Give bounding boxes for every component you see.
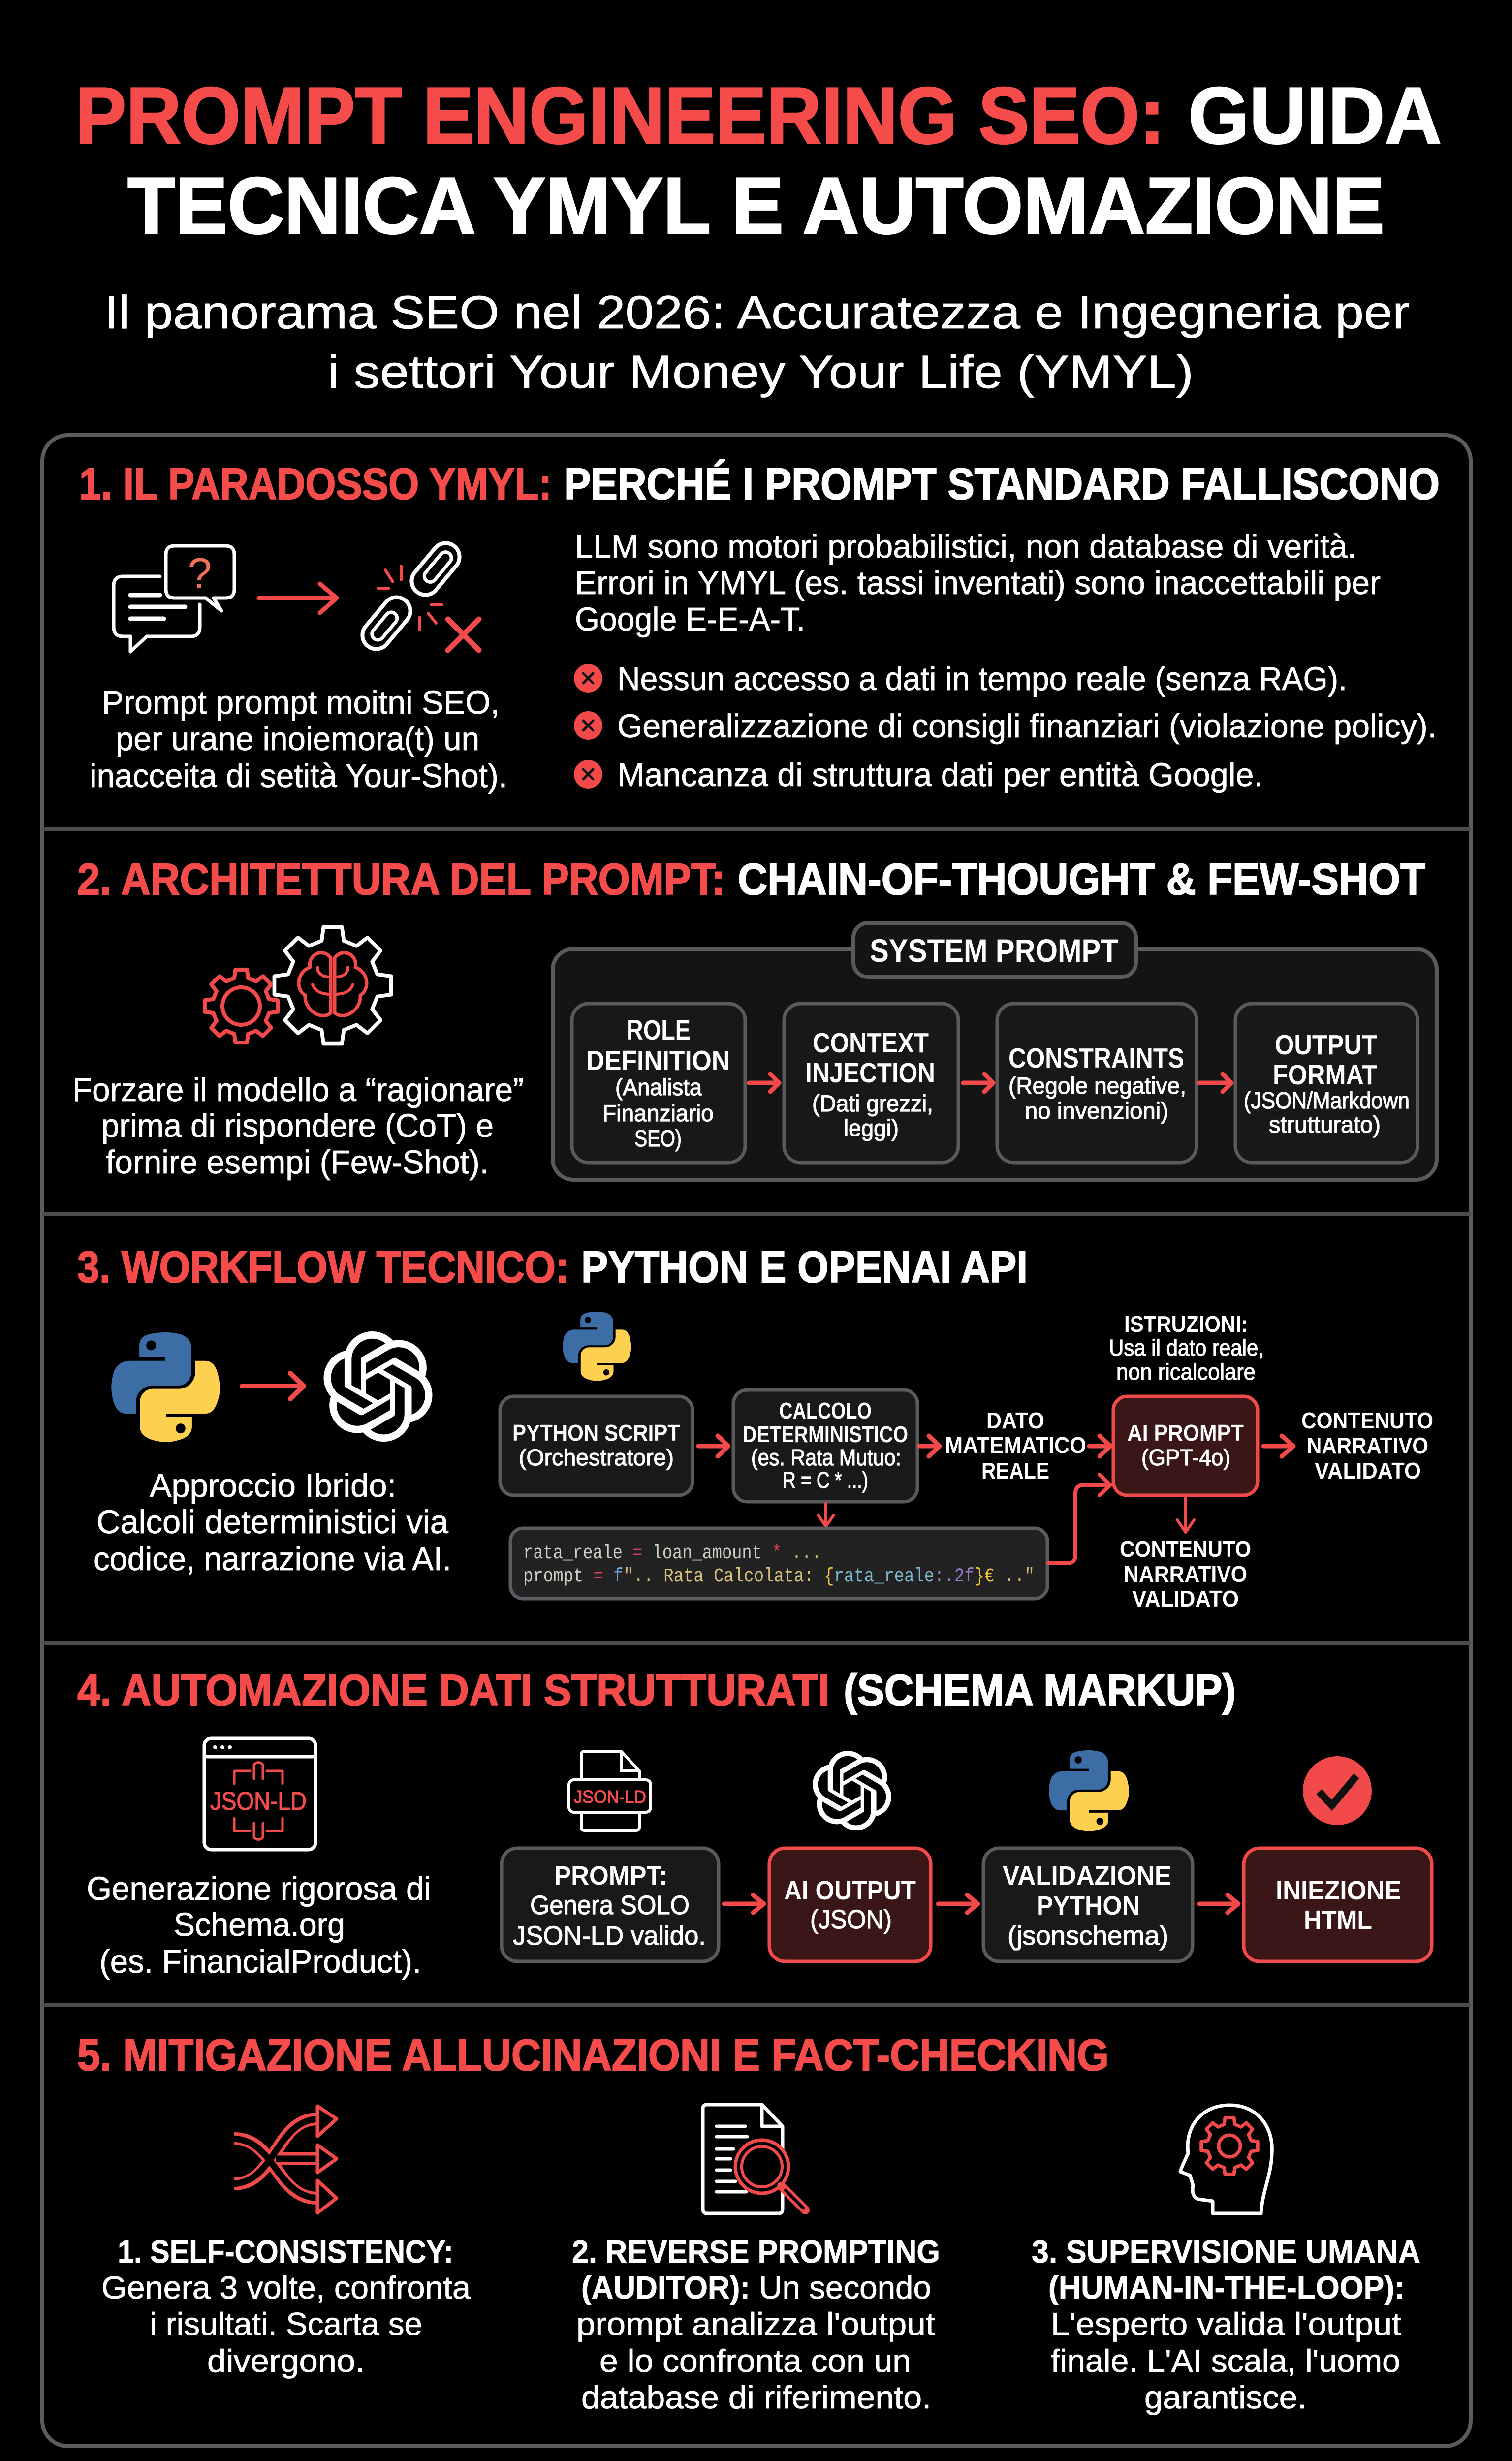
box: context injection: INJECTION [805,1057,935,1089]
heading: section 4 [77,1666,1236,1715]
box: AI prompt: AI PROMPT [1127,1420,1244,1446]
bullet: missing data structure: Mancanza di struttura dati per entità Google. [617,757,1263,793]
box: context injection: CONTEXT [813,1027,929,1059]
icon: gears with brain [205,927,391,1044]
box: prompt genera solo JSON-LD: JSON-LD valido. [513,1921,706,1951]
arrow [938,1895,978,1913]
label: contenuto narrativo validato bottom: NARRATIVO [1124,1561,1247,1587]
panel: section 4 dati strutturati [77,1666,1432,1980]
label: contenuto narrativo validato right: VALIDATO [1315,1458,1421,1483]
text: LLM explanation: LLM sono motori probabilistici, non database di verità. [575,528,1356,565]
box: prompt genera solo JSON-LD: PROMPT: [554,1861,667,1891]
text: LLM explanation [575,528,1381,638]
heading: section 2: 2. ARCHITETTURA DEL PROMPT: [77,855,725,904]
icon: python logo [1049,1750,1129,1831]
box: context injection: (Dati grezzi, [812,1090,933,1116]
text: supervisione umana: (HUMAN-IN-THE-LOOP): [1048,2270,1405,2305]
heading: section 3 [77,1243,1028,1292]
text: left caption [72,1072,524,1181]
text: reverse prompting: prompt analizza l'output [576,2306,935,2342]
icon: JSON-LD browser window: JSON-LD [210,1787,307,1816]
title: TECNICA YMYL E AUTOMAZIONE [127,160,1385,251]
text: left caption: Approccio Ibrido: [150,1467,396,1504]
text: reverse prompting [572,2234,940,2415]
text: left caption: Schema.org [174,1906,345,1943]
label: dato matematico reale [945,1408,1086,1483]
text: reverse prompting: (AUDITOR): [581,2270,750,2305]
box: constraints: CONSTRAINTS [1008,1042,1184,1074]
text: left caption: per urane inoiemora(t) un [116,721,479,757]
heading: section 1: 1. IL PARADOSSO YMYL: [79,460,552,509]
arrow [724,1895,764,1913]
icon: JSON-LD browser window [204,1738,315,1850]
text: left caption: codice, narrazione via AI. [94,1541,451,1578]
text: LLM explanation: Errori in YMYL (es. tassi inventati) sono inaccettabili per [575,565,1381,601]
text: self-consistency: i risultati. Scarta se [150,2306,422,2342]
label: system prompt [853,923,1136,977]
label: dato matematico reale: DATO [986,1408,1044,1433]
box: AI prompt: (GPT-4o) [1141,1445,1230,1470]
box: output format: OUTPUT [1275,1029,1377,1061]
label: dato matematico reale: REALE [981,1458,1049,1483]
text: left caption: fornire esempi (Few-Shot). [106,1144,489,1181]
bullet: no real-time data: Nessun accesso a dati in tempo reale (senza RAG). [617,661,1347,697]
box: output format: strutturato) [1269,1111,1381,1137]
heading: section 4: 4. AUTOMAZIONE DATI STRUTTURATI [77,1666,829,1715]
arrow [1199,1895,1238,1913]
code block [510,1528,1047,1599]
arrow: python to openai [242,1373,304,1399]
text: LLM explanation: Google E-E-A-T. [575,601,805,638]
arrow: bubbles to broken chain [259,584,337,613]
heading: section 4: (SCHEMA MARKUP) [844,1666,1236,1715]
box: role definition: Finanziario [602,1100,714,1126]
box: python script [500,1396,693,1495]
text: left caption: (es. FinancialProduct). [99,1943,421,1980]
text: left caption: Prompt prompt moitni SEO, [102,684,500,721]
icon: JSON-LD file: JSON-LD [574,1787,646,1807]
icon: document with magnifier [703,2105,805,2213]
label: istruzioni: ISTRUZIONI: [1124,1311,1248,1337]
box: AI output: (JSON) [810,1905,892,1934]
arrow: calcolo down to code [818,1503,834,1526]
text: self-consistency: divergono. [207,2343,365,2379]
text: left caption: Generazione rigorosa di [87,1870,431,1907]
text: left caption [94,1467,451,1578]
label: contenuto narrativo validato right: CONTENUTO [1301,1408,1433,1433]
label: contenuto narrativo validato bottom [1120,1536,1251,1611]
text: reverse prompting: e lo confronta con un [599,2343,911,2379]
text: self-consistency: Genera 3 volte, confronta [101,2270,471,2305]
arrow [749,1074,779,1092]
heading: section 1 [79,459,1440,509]
box: output format [1235,1004,1418,1163]
icon: red check circle [1303,1756,1372,1825]
box: prompt genera solo JSON-LD [502,1848,719,1961]
code block: prompt = f".. Rata Calcolata: {rata_reale:.2f}€ .." [523,1566,1035,1588]
title [75,70,1442,251]
title: GUIDA [1188,70,1442,160]
label: contenuto narrativo validato right [1301,1408,1433,1483]
panel: system prompt [553,923,1437,1180]
box: calcolo deterministico: R = C * ...) [783,1467,868,1493]
arrow: code to AI prompt [1048,1475,1110,1563]
box: constraints: no invenzioni) [1025,1098,1168,1124]
panel: section 5 mitigazione allucinazioni [77,2031,1420,2415]
box: output format: (JSON/Markdown [1244,1087,1410,1113]
box: AI output [769,1848,931,1961]
text: supervisione umana: 3. SUPERVISIONE UMANA [1032,2234,1420,2270]
box: iniezione HTML: INIEZIONE [1276,1876,1401,1905]
box: python script: PYTHON SCRIPT [512,1420,680,1446]
arrow [1199,1074,1231,1092]
box: calcolo deterministico: CALCOLO [779,1398,872,1423]
text: left caption: inacceita di setità Your-Shot). [90,757,507,794]
box: iniezione HTML: HTML [1304,1905,1372,1935]
icon: JSON-LD file [569,1751,651,1830]
heading: section 3: 3. WORKFLOW TECNICO: [77,1243,569,1292]
box: output format: FORMAT [1273,1059,1377,1091]
panel: section 3 workflow tecnico [77,1243,1433,1611]
text: supervisione umana: garantisce. [1144,2379,1307,2415]
label: istruzioni: non ricalcolare [1116,1359,1256,1385]
box: role definition [572,1004,745,1163]
icon: broken chain with red X [357,537,479,655]
text: supervisione umana [1032,2234,1420,2415]
icon: openai logo large [324,1331,432,1442]
label: contenuto narrativo validato bottom: VALIDATO [1132,1586,1239,1611]
code block: rata_reale = loan_amount * ... [523,1543,821,1565]
text: supervisione umana: finale. L'AI scala, l'uomo [1051,2343,1400,2379]
heading: section 3: PYTHON E OPENAI API [581,1243,1028,1292]
bullet: financial advice generalization: Generalizzazione di consigli finanziari (violazione policy). [617,708,1437,745]
text: left caption [90,684,507,794]
arrow [963,1074,993,1092]
panel: section 1 paradosso YMYL [79,459,1440,794]
box: calcolo deterministico [733,1390,917,1502]
heading: section 2 [77,855,1425,904]
icon: chat bubbles with question mark: ? [188,549,212,598]
label: dato matematico reale: MATEMATICO [945,1432,1086,1458]
box: role definition: ROLE [627,1014,691,1046]
label: istruzioni [1109,1311,1264,1385]
title: PROMPT ENGINEERING SEO: [75,70,1165,160]
box: prompt genera solo JSON-LD: Genera SOLO [530,1891,690,1920]
box: validazione python [983,1848,1193,1961]
arrow [919,1436,940,1456]
box: calcolo deterministico: (es. Rata Mutuo: [751,1445,901,1470]
panel: section 2 architettura del prompt [72,855,1437,1181]
box: iniezione HTML [1244,1848,1432,1961]
box: constraints: (Regole negative, [1008,1073,1186,1099]
box: context injection [784,1004,958,1163]
heading: section 1: PERCHÉ I PROMPT STANDARD FALLISCONO [564,459,1440,509]
box: validazione python: VALIDAZIONE [1003,1861,1171,1891]
heading: section 5: 5. MITIGAZIONE ALLUCINAZIONI E FACT-CHECKING [77,2031,1109,2080]
box: context injection: leggi) [844,1115,899,1141]
panel: main frame [42,435,1471,2446]
arrow [1263,1436,1293,1456]
box: role definition: (Analista [615,1074,702,1100]
text: self-consistency: 1. SELF-CONSISTENCY: [118,2234,453,2270]
box: python script: (Orchestratore) [519,1445,674,1470]
text: supervisione umana: L'esperto valida l'output [1051,2306,1401,2342]
label: istruzioni: Usa il dato reale, [1109,1335,1264,1360]
icon: chat bubbles with question mark [114,546,234,652]
icon: python logo large [111,1332,220,1442]
icon: shuffle arrows [231,2106,337,2213]
text: left caption [87,1870,431,1980]
text: left caption: Calcoli deterministici via [96,1504,449,1541]
text: reverse prompting: Un secondo [759,2270,931,2305]
subtitle [104,286,1410,398]
box: constraints [997,1004,1197,1163]
arrow: AI prompt down [1177,1497,1194,1532]
box: calcolo deterministico: DETERMINISTICO [743,1421,908,1447]
text: self-consistency [101,2234,471,2379]
box: validazione python: PYTHON [1037,1891,1140,1921]
text: left caption: prima di rispondere (CoT) e [101,1107,494,1144]
label: system prompt: SYSTEM PROMPT [870,932,1118,969]
box: role definition: SEO) [634,1125,682,1151]
subtitle: i settori Your Money Your Life (YMYL) [328,346,1194,398]
box: validazione python: (jsonschema) [1008,1921,1168,1951]
icon: python logo small [563,1312,631,1381]
text: reverse prompting: 2. REVERSE PROMPTING [572,2234,940,2270]
arrow [1089,1436,1110,1456]
text: left caption: Forzare il modello a “ragionare” [72,1072,524,1108]
box: AI output: AI OUTPUT [784,1876,916,1905]
icon: head with gear [1180,2105,1272,2213]
arrow [698,1436,728,1456]
box: role definition: DEFINITION [586,1045,730,1076]
icon: openai logo [813,1751,891,1830]
subtitle: Il panorama SEO nel 2026: Accuratezza e Ingegneria per [104,286,1410,339]
label: contenuto narrativo validato bottom: CONTENUTO [1120,1536,1251,1562]
text: reverse prompting: database di riferimento. [581,2379,931,2415]
heading: section 2: CHAIN-OF-THOUGHT & FEW-SHOT [738,855,1425,904]
label: contenuto narrativo validato right: NARRATIVO [1307,1433,1428,1458]
box: AI prompt [1113,1396,1258,1495]
